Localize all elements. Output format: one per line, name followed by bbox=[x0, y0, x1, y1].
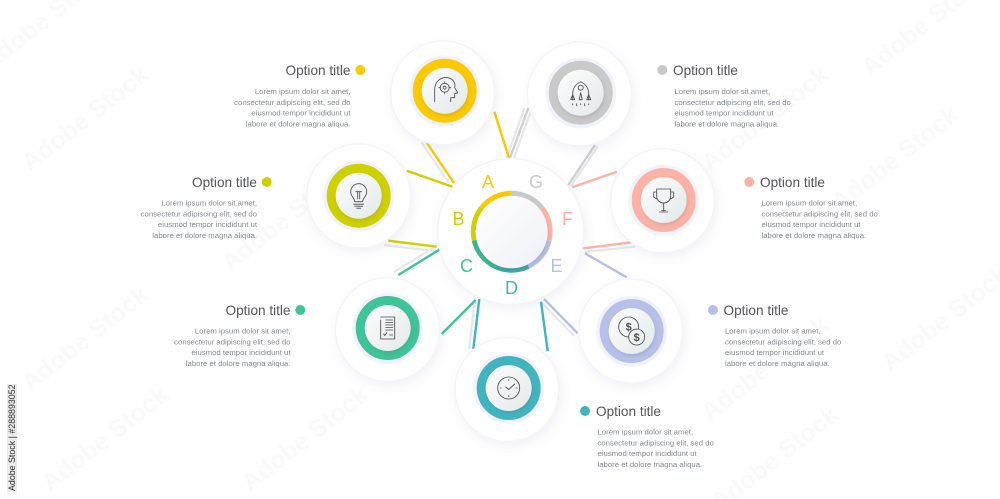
text block: option F: eiusmod tempor incididunt ut bbox=[762, 220, 861, 229]
segment letters: E bbox=[550, 256, 563, 276]
text block: option C: Option title bbox=[226, 303, 290, 318]
background watermark: Adobe Stock bbox=[826, 101, 964, 217]
panel: option A node bbox=[391, 41, 495, 145]
text block: option C: Lorem ipsum dolor sit amet, bbox=[195, 326, 290, 336]
text block: option C: labore et dolore magna aliqua. bbox=[186, 359, 290, 368]
text block: option E: eiusmod tempor incididunt ut bbox=[725, 348, 825, 357]
text block: option F: Lorem ipsum dolor sit amet, bbox=[762, 198, 857, 208]
icon: light bulb bbox=[351, 184, 367, 208]
segment letters: A bbox=[482, 172, 494, 192]
text block: option C bbox=[174, 303, 305, 368]
text block: option F: consectetur adipiscing elit, sed do bbox=[762, 210, 878, 218]
text block: option B: labore et dolore magna aliqua. bbox=[152, 231, 257, 240]
panel: option E node bbox=[579, 279, 683, 383]
text block: option B bbox=[141, 175, 272, 240]
text block: option C: consectetur adipiscing elit, sed do bbox=[174, 338, 290, 346]
segment letters: D bbox=[505, 278, 518, 298]
text block: option G: eiusmod tempor incididunt ut bbox=[674, 108, 774, 118]
panel: option C node bbox=[336, 278, 440, 382]
text block: option A: Lorem ipsum dolor sit amet, bbox=[255, 87, 350, 96]
segment letters: B bbox=[452, 209, 465, 229]
background watermark: Adobe Stock bbox=[696, 311, 834, 427]
panel: option G node bbox=[528, 42, 632, 146]
text block: option D: Option title bbox=[596, 404, 661, 419]
background watermark: Adobe Stock bbox=[16, 281, 154, 397]
segmented ring bbox=[473, 193, 550, 270]
connector wedges bbox=[384, 108, 635, 351]
text block: option E: consectetur adipiscing elit, sed do bbox=[725, 338, 841, 346]
text block: option E: Lorem ipsum dolor sit amet, bbox=[725, 326, 821, 336]
text block: option G: labore et dolore magna aliqua. bbox=[674, 120, 779, 128]
center disc bbox=[476, 197, 547, 268]
text block: option B: consectetur adipiscing elit, sed do bbox=[141, 210, 257, 218]
text block: option F: Option title bbox=[760, 175, 825, 190]
icon: trophy bbox=[654, 189, 674, 212]
text block: option D: labore et dolore magna aliqua. bbox=[598, 460, 702, 469]
background watermark: Adobe Stock bbox=[16, 61, 154, 177]
panel: option B node bbox=[307, 144, 411, 248]
panel: option F node bbox=[610, 149, 714, 253]
icon: head with gear bbox=[435, 78, 458, 102]
segment letters: G bbox=[529, 172, 543, 192]
icon: coins: $ bbox=[626, 322, 632, 334]
icon: document bbox=[381, 317, 395, 339]
text block: option G bbox=[657, 63, 791, 128]
icon: coins bbox=[619, 317, 645, 345]
text block: option E bbox=[708, 303, 841, 368]
text block: option D bbox=[580, 404, 714, 469]
text block: option D: eiusmod tempor incididunt ut bbox=[598, 449, 697, 458]
text block: option A: consectetur adipiscing elit, sed do bbox=[234, 98, 350, 107]
text block: option B: eiusmod tempor incididunt ut bbox=[158, 220, 258, 229]
icon: coins: $ bbox=[634, 332, 640, 344]
text block: option A bbox=[234, 63, 365, 128]
background watermark: Adobe Stock bbox=[36, 381, 174, 497]
text block: option G: Lorem ipsum dolor sit amet, bbox=[674, 87, 770, 96]
panel: central hub bbox=[438, 158, 584, 304]
text block: option B: Lorem ipsum dolor sit amet, bbox=[161, 198, 257, 208]
text block: option G: consectetur adipiscing elit, sed do bbox=[674, 98, 791, 107]
text block: option A: labore et dolore magna aliqua. bbox=[246, 120, 350, 128]
text block: option D: Lorem ipsum dolor sit amet, bbox=[598, 428, 693, 436]
panel: option D node bbox=[455, 338, 559, 442]
text block: option C: eiusmod tempor incididunt ut bbox=[191, 348, 291, 357]
background watermark: Adobe Stock bbox=[236, 381, 374, 497]
text block: option F bbox=[744, 175, 878, 240]
background watermark: Adobe Stock bbox=[216, 161, 354, 277]
icon: rocket bbox=[571, 82, 591, 106]
text block: option B: Option title bbox=[192, 175, 257, 190]
text block: option E: Option title bbox=[724, 303, 788, 318]
text block: option D: consectetur adipiscing elit, sed do bbox=[598, 438, 714, 448]
segment letters: F bbox=[562, 209, 573, 229]
text block: option A: Option title bbox=[286, 63, 350, 78]
background watermark: Adobe Stock bbox=[696, 61, 834, 177]
segment letters bbox=[452, 172, 573, 298]
icon: clock bbox=[498, 377, 520, 399]
stock id caption: Adobe Stock | #288893052 bbox=[7, 384, 17, 491]
text block: option E: labore et dolore magna aliqua. bbox=[725, 359, 830, 368]
text block: option A: eiusmod tempor incididunt ut bbox=[251, 108, 351, 118]
segment letters: C bbox=[460, 256, 473, 276]
text block: option F: labore et dolore magna aliqua. bbox=[762, 231, 866, 240]
text block: option G: Option title bbox=[673, 63, 738, 78]
